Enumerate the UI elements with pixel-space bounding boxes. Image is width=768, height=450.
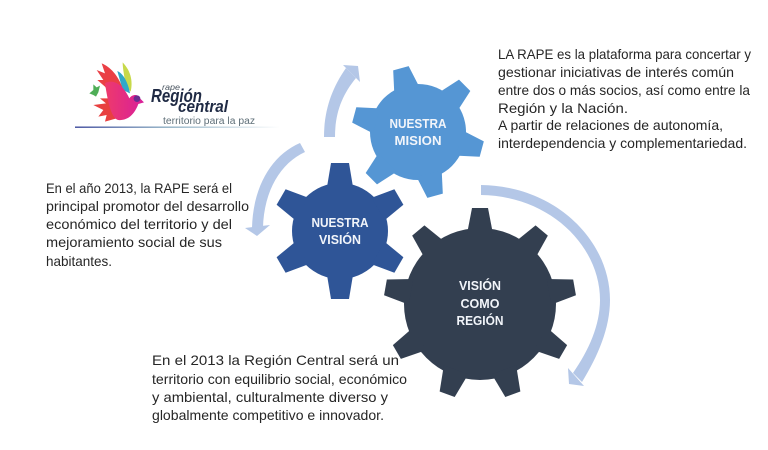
- logo wordmark: Región: [151, 86, 202, 106]
- gear: vision como region: [383, 208, 577, 399]
- arrow: around region gear: [481, 185, 610, 386]
- logo wordmark: central: [178, 97, 229, 116]
- text block: regional vision: [152, 352, 407, 423]
- label: nuestra mision: MISION: [394, 133, 442, 148]
- arrow: vision to mision: [324, 65, 360, 137]
- text block: vision statement: [46, 180, 249, 269]
- logo wordmark: rape: [162, 83, 181, 92]
- arrow: mision to vision: [245, 143, 305, 236]
- label: vision como region: REGIÓN: [456, 313, 504, 328]
- text block: about RAPE: [498, 46, 751, 151]
- logo: RAPE Región Central: [75, 62, 280, 128]
- text block: regional vision: En el 2013 la Región Central será un: [152, 352, 399, 368]
- text block: vision statement: habitantes.: [46, 253, 112, 269]
- text block: about RAPE: A partir de relaciones de autonomía,: [498, 117, 723, 133]
- label: vision como region: VISIÓN: [459, 278, 501, 293]
- label: nuestra vision: NUESTRA: [312, 215, 369, 230]
- label: nuestra vision: [312, 215, 369, 247]
- label: vision como region: [456, 278, 504, 328]
- text block: vision statement: En el año 2013, la RAPE será el: [46, 180, 232, 196]
- text block: regional vision: territorio con equilibrio social, económico: [152, 371, 407, 387]
- text block: about RAPE: Región y la Nación.: [498, 100, 628, 116]
- label: nuestra mision: [390, 116, 447, 148]
- logo tagline: territorio para la paz: [163, 116, 255, 127]
- text block: about RAPE: entre dos o más socios, así como entre la: [498, 82, 750, 98]
- text block: about RAPE: LA RAPE es la plataforma para concertar y: [498, 46, 751, 62]
- icon: logo bird: [89, 62, 144, 122]
- logo wordmark: [151, 83, 229, 116]
- text block: about RAPE: interdependencia y complementariedad.: [498, 135, 747, 151]
- text block: regional vision: y ambiental, culturalmente diverso y: [152, 389, 388, 405]
- gear: nuestra mision: [351, 65, 485, 199]
- label: nuestra vision: VISIÓN: [319, 232, 361, 247]
- text block: vision statement: mejoramiento social de sus: [46, 234, 222, 250]
- text block: regional vision: globalmente competitivo e innovador.: [152, 407, 384, 423]
- text block: vision statement: principal promotor del desarrollo: [46, 198, 249, 214]
- label: vision como region: COMO: [460, 296, 500, 311]
- text block: vision statement: económico del territorio y del: [46, 216, 232, 232]
- label: nuestra mision: NUESTRA: [390, 116, 447, 131]
- gear: nuestra vision: [275, 163, 405, 299]
- text block: about RAPE: gestionar iniciativas de interés común: [498, 64, 734, 80]
